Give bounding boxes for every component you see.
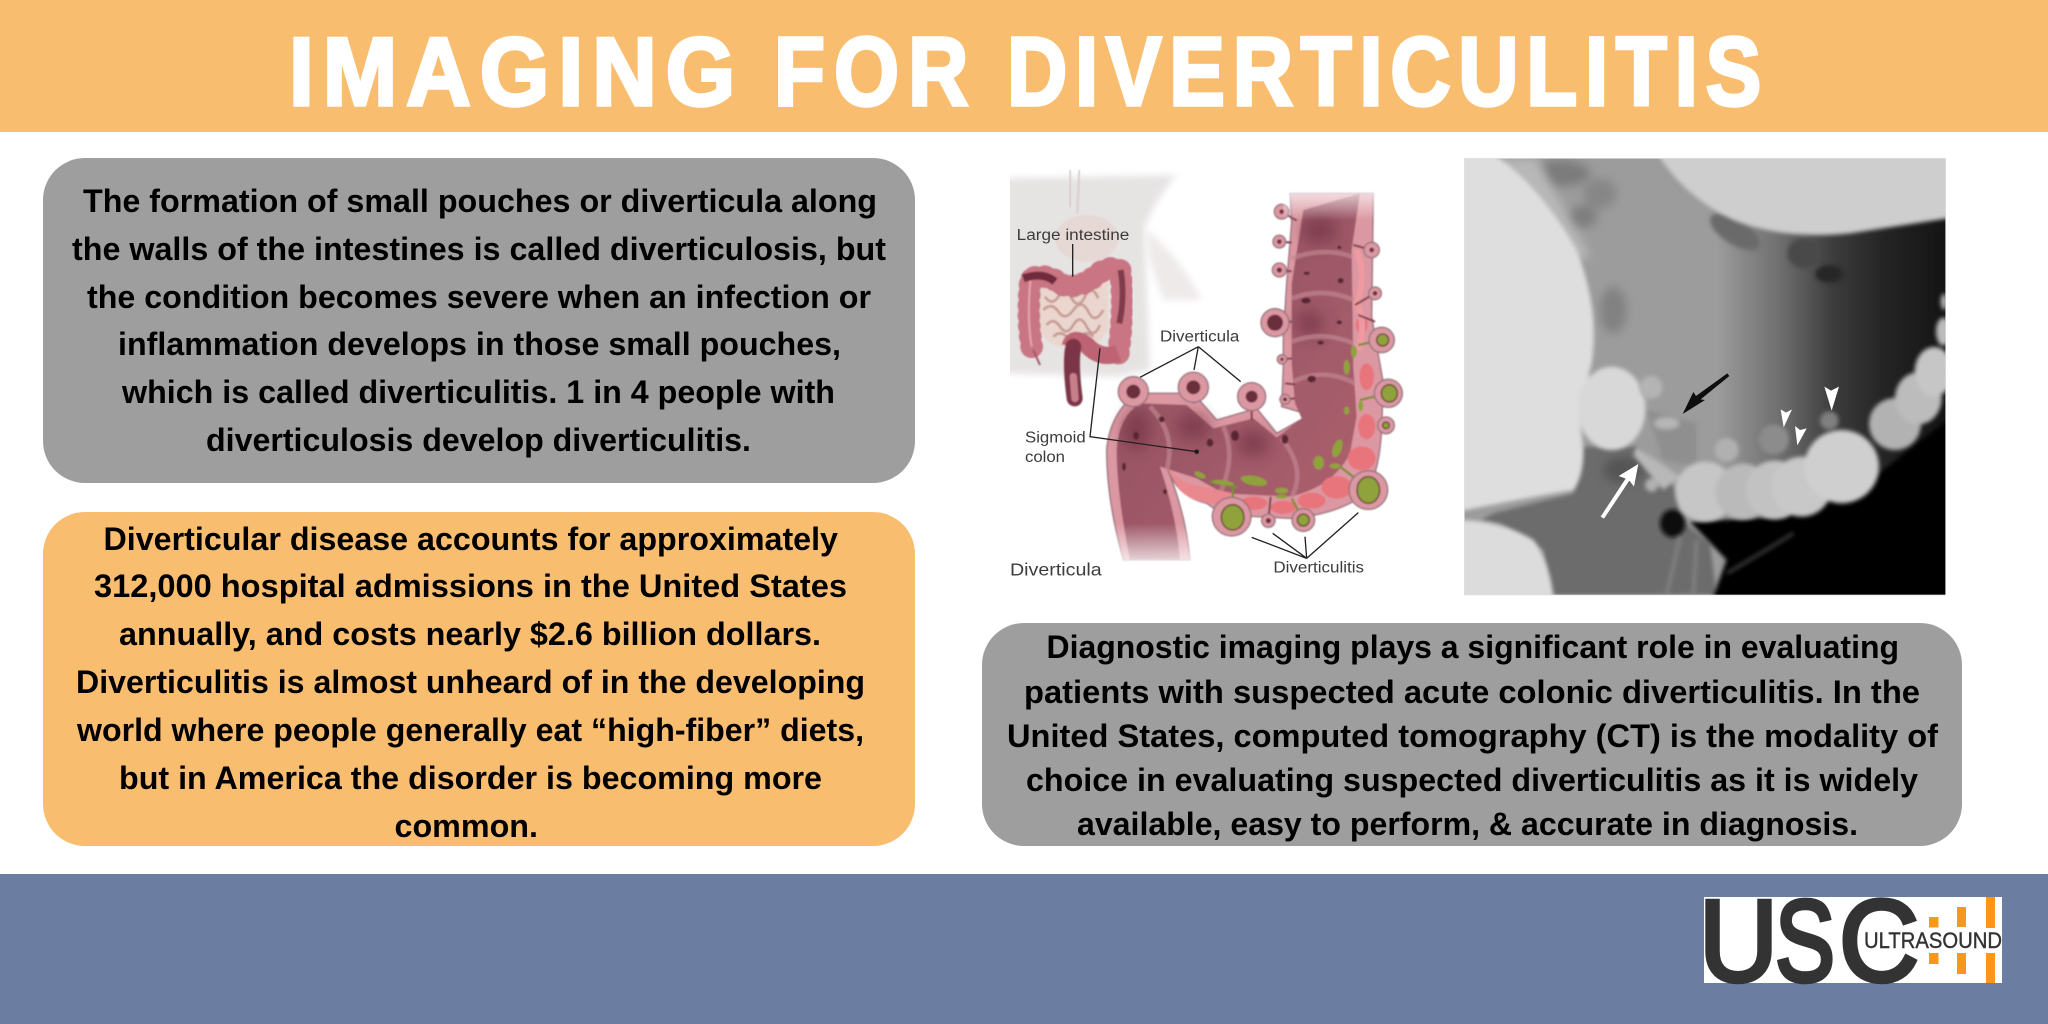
- anatomy labels: Diverticula: [1010, 560, 1102, 580]
- panel: diverticulosis definition: the condition becomes severe when an infection or: [87, 279, 871, 315]
- body silhouette: [990, 170, 1202, 390]
- panel: diverticulosis definition: the walls of the intestines is called diverticulosis, but: [72, 231, 886, 267]
- pus patches: [1193, 346, 1363, 499]
- logo: USC Ultrasound: C: [1839, 876, 1919, 1006]
- footer band: [0, 874, 2048, 1024]
- pink fold tongue: [1167, 467, 1233, 504]
- anatomy labels: Diverticula: [1160, 329, 1240, 346]
- logo: USC Ultrasound: ULTRASOUND: [1864, 928, 2002, 953]
- diverticula pouches: [1118, 204, 1402, 536]
- anatomy labels: Diverticulitis: [1273, 560, 1364, 577]
- panel: hospital admissions and costs: common.: [394, 808, 538, 844]
- stems: [1133, 212, 1375, 521]
- title: IMAGING: [289, 18, 735, 126]
- panel: hospital admissions and costs: world where people generally eat “high-fiber” diets,: [76, 712, 864, 748]
- black arrow: [1683, 373, 1729, 414]
- header banner: [0, 0, 2048, 132]
- panel: diagnostic imaging: Diagnostic imaging plays a significant role in evaluating: [1046, 629, 1899, 665]
- panel: diverticulosis definition: diverticulosis develop diverticulitis.: [206, 422, 751, 458]
- panel: diverticulosis definition: inflammation develops in those small pouches,: [118, 326, 841, 362]
- lumen shading: [1123, 217, 1338, 457]
- white arrow: [1601, 464, 1638, 519]
- white arrowheads: [1781, 387, 1839, 445]
- logo: USC Ultrasound: U: [1699, 876, 1778, 1006]
- panel: hospital admissions and costs: 312,000 hospital admissions in the United States: [94, 568, 847, 604]
- panel: diverticulosis definition: [43, 158, 915, 483]
- panel: diverticulosis definition: The formation of small pouches or diverticula along: [83, 183, 877, 219]
- colon haustra: [1633, 294, 1953, 522]
- panel: hospital admissions and costs: Diverticular disease accounts for approximately: [104, 521, 838, 557]
- anatomy illustration: diverticula and diverticulitis: [1010, 170, 1404, 580]
- bottom and top fades: [1100, 523, 1200, 573]
- gas pockets: [1704, 206, 1843, 283]
- anatomy labels: Large intestine: [1017, 227, 1129, 244]
- black lower right: [1688, 422, 1946, 595]
- panel: hospital admissions and costs: but in America the disorder is becoming more: [119, 760, 822, 796]
- title: [289, 18, 1761, 126]
- panel: hospital admissions and costs: Diverticulitis is almost unheard of in the developing: [76, 664, 865, 700]
- inflamed wall segments: [1239, 316, 1376, 514]
- anatomy labels: colon: [1025, 449, 1065, 466]
- callout leader lines: [1073, 244, 1358, 558]
- barium-filled bowel: [1464, 158, 1946, 595]
- panel: diagnostic imaging: United States, computed tomography (CT) is the modality of: [1007, 718, 1938, 754]
- small diverticula: [1639, 376, 1839, 467]
- x-ray background: [1464, 158, 1946, 595]
- panel: hospital admissions and costs: [43, 512, 915, 846]
- x-ray image of colon with arrows: [1464, 158, 1946, 596]
- panel: diagnostic imaging: available, easy to perform, & accurate in diagnosis.: [1077, 806, 1858, 842]
- panel: diagnostic imaging: [982, 623, 1962, 846]
- panel: diagnostic imaging: patients with suspected acute colonic diverticulitis. In the: [1024, 674, 1920, 710]
- lumen pits: [1122, 246, 1344, 494]
- main colon cross-section: [1100, 180, 1402, 586]
- title: FOR: [774, 18, 968, 126]
- logo: USC Ultrasound: [1699, 876, 2002, 1006]
- panel: hospital admissions and costs: annually, and costs nearly $2.6 billion dollars.: [119, 616, 821, 652]
- mottled tissue near top: [1490, 158, 1627, 333]
- title: DIVERTICULITIS: [1007, 18, 1761, 126]
- panel: diagnostic imaging: choice in evaluating suspected diverticulitis as it is widely: [1026, 762, 1918, 798]
- logo: USC Ultrasound: S: [1775, 876, 1835, 1006]
- anatomy labels: Sigmoid: [1025, 430, 1086, 447]
- lower left mid-gray: [1482, 447, 1717, 595]
- inset large intestine: [1023, 268, 1123, 398]
- anatomy labels: [1010, 227, 1364, 580]
- panel: diverticulosis definition: which is called diverticulitis. 1 in 4 people with: [121, 374, 835, 410]
